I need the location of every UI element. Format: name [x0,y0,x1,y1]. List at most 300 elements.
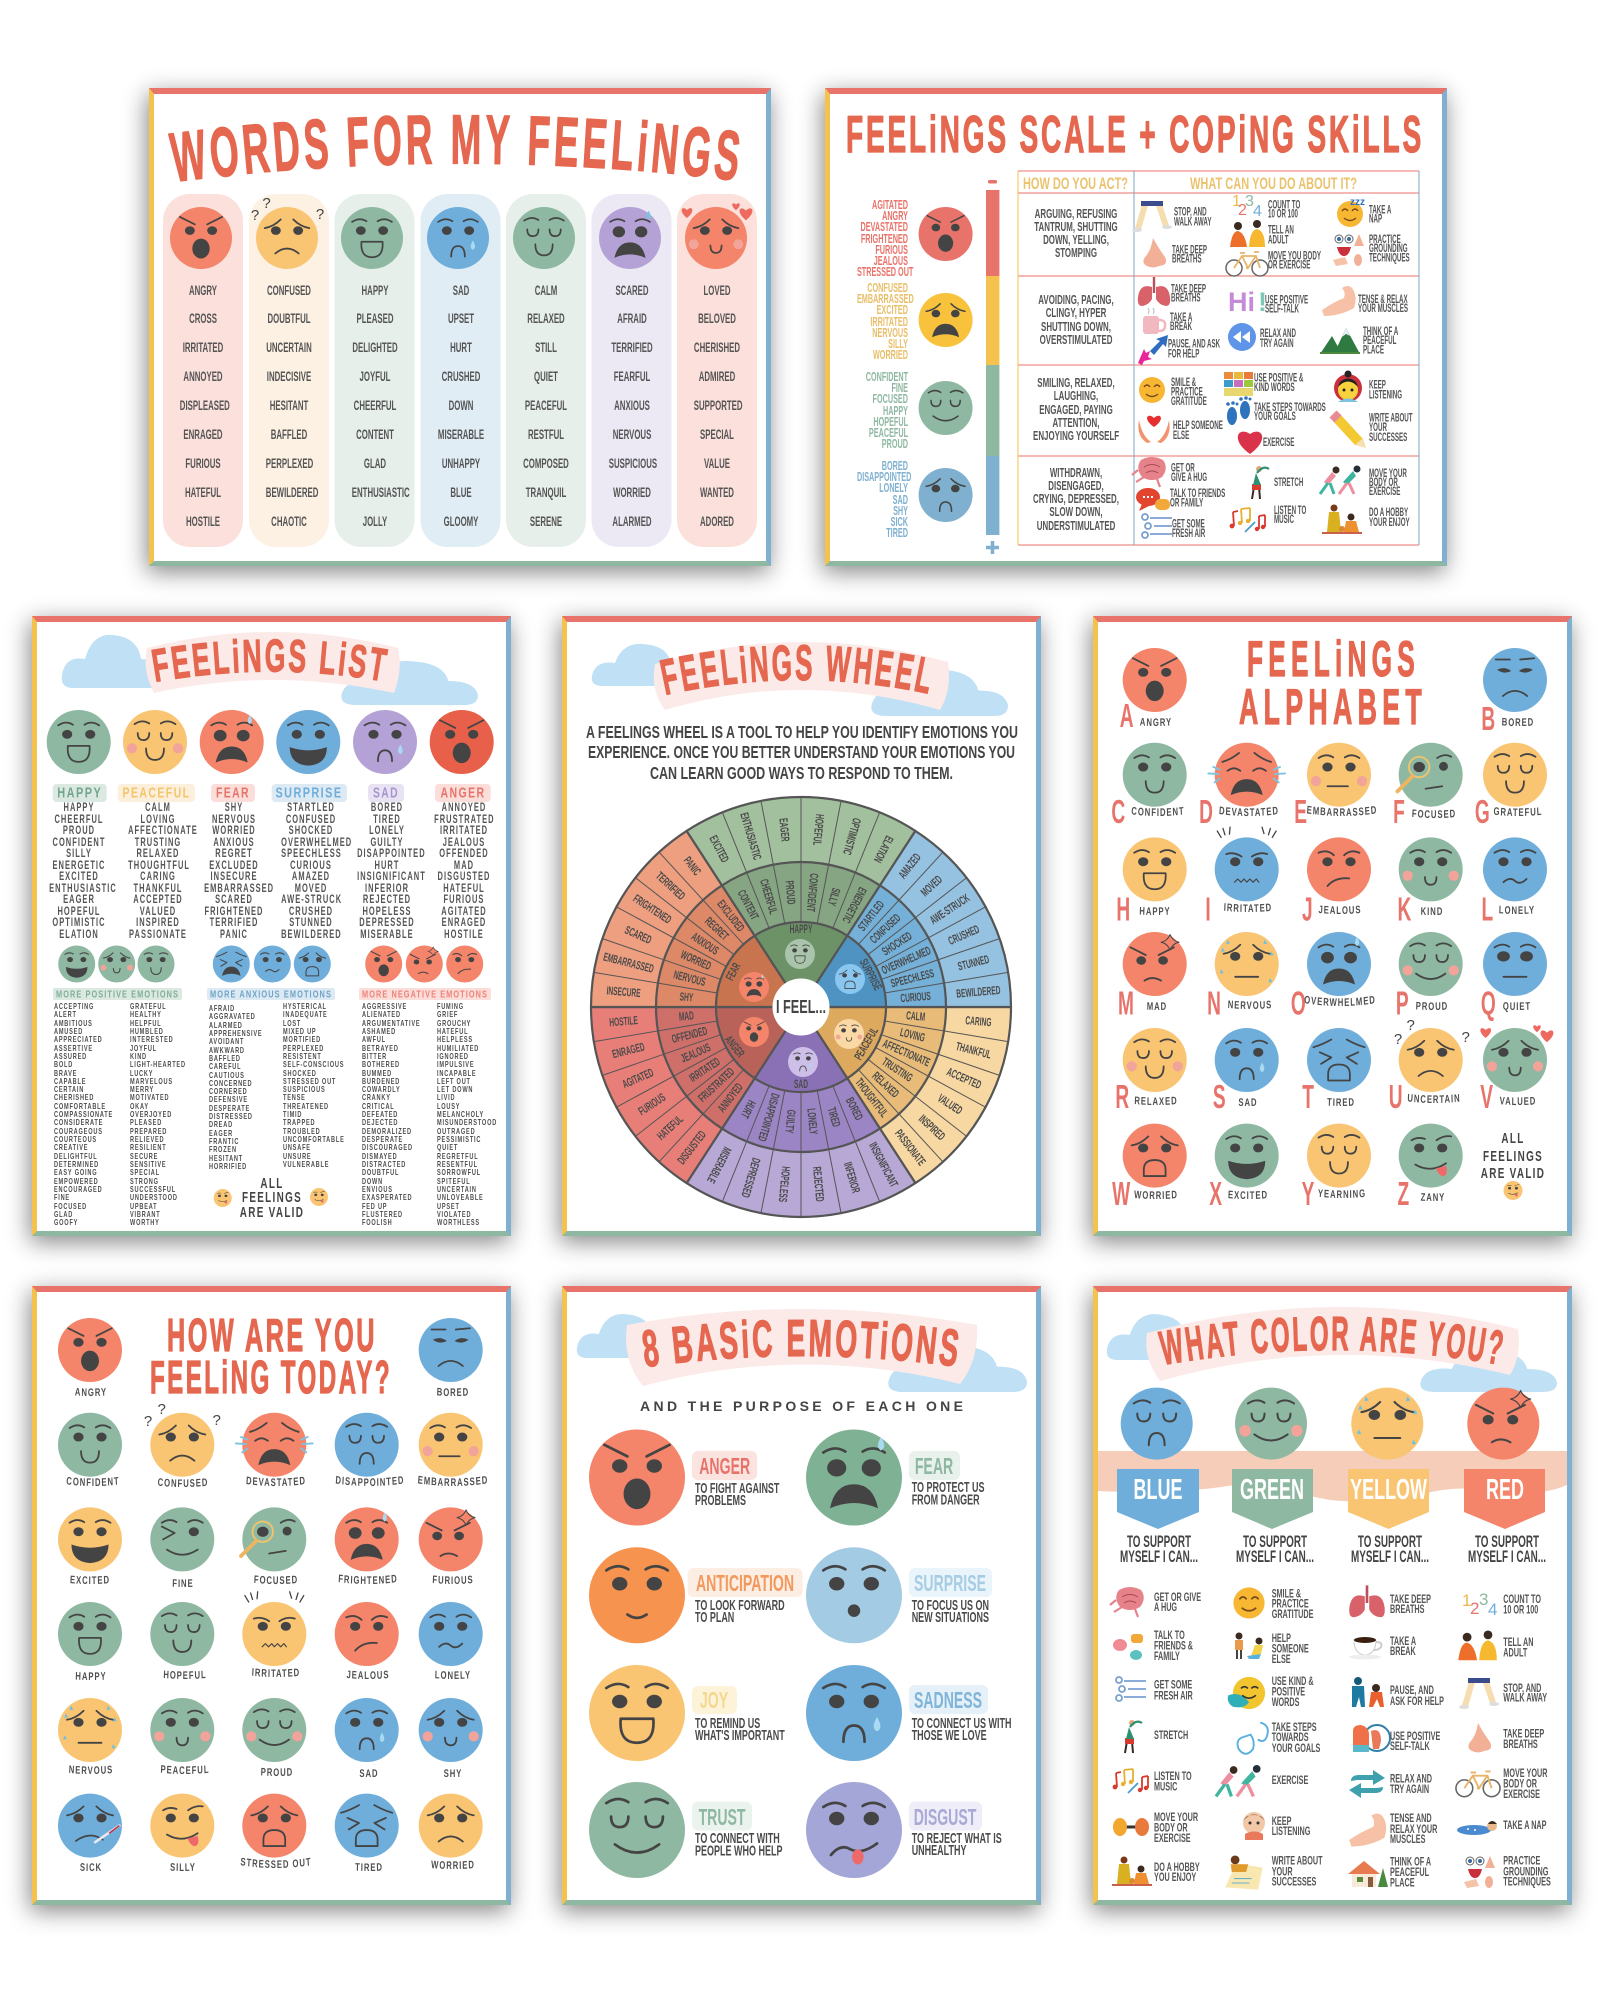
letter U: ? [1394,1031,1402,1048]
coping: peaceful place: PLACE [1363,343,1384,356]
red: count [1462,1590,1541,1619]
words: positive column 1: CONSIDERATE [54,1117,103,1127]
face: tired [335,1794,399,1874]
middle ring labels: TRUSTING [879,1055,915,1085]
words: positive column 1: CAPABLE [54,1076,86,1086]
emotion: anger [589,1430,780,1526]
words: negative column 2: GRIEF [437,1009,458,1019]
all feelings are valid: ARE VALID [1481,1165,1545,1182]
column: sad: CRUSHED [441,369,480,384]
face: confident: CONFIDENT [66,1477,118,1486]
coping: stop and walk away: WALK AWAY [1174,216,1212,228]
coping: move your body: EXERCISE [1369,485,1400,497]
column: loved: SUPPORTED [694,398,743,413]
inner labels: FEAR [724,961,744,983]
words: negative column 1: ARGUMENTATIVE [362,1018,420,1028]
list: anger: ANNOYED [442,802,486,814]
list: peaceful: CALM [145,802,171,814]
words: negative column 2: HUMILIATED [437,1043,479,1053]
words: anxious column 1: DREAD [209,1119,233,1129]
letter R: R [1115,1079,1129,1115]
coping: grounding: TECHNIQUES [1369,252,1410,264]
yellow: pause and ask: ASK FOR HELP [1390,1695,1444,1709]
coping: tense and relax: YOUR MUSCLES [1358,302,1408,315]
yellow: self talk: SELF-TALK [1390,1741,1430,1754]
emotion: surprise [806,1547,992,1643]
emotion: sadness: SADNESS [914,1687,982,1714]
list: anger: IRRITATED [440,825,488,837]
column header: red: RED [1486,1474,1524,1506]
column: scared: FEARFUL [613,369,650,384]
emotion: anticipation [589,1547,803,1643]
coping: stop and walk away [1132,201,1212,232]
words: negative column 1: BETRAYED [362,1043,398,1053]
words: anxious column 1: APPREHENSIVE [209,1028,262,1038]
scale bar [986,180,999,554]
letter U: UNCERTAIN [1408,1094,1460,1103]
list: happy: ENERGETIC [53,860,105,872]
yellow: pause and ask [1352,1677,1444,1709]
face: embarrassed: EMBARRASSED [418,1476,487,1486]
words: anxious column 1: CAREFUL [209,1061,241,1071]
column: loved: CHERISHED [694,340,740,355]
words: anxious column 2: LOST [283,1018,301,1028]
column: scared: SUSPICIOUS [608,456,657,471]
feeling words: yellow zone: EXCITED [877,303,908,317]
feeling words: yellow zone: EMBARRASSED [857,292,914,306]
words: positive column 1: DELIGHTFUL [54,1151,97,1161]
acting column: DISENGAGED, [1048,479,1104,494]
middle ring labels: SPEECHLESS [889,967,936,991]
coping: grounding: GROUNDING [1369,242,1408,255]
coping: help someone: ELSE [1173,429,1189,441]
letter Z: Z [1397,1176,1409,1212]
words: anxious column 2: TIMID [283,1109,302,1119]
list: peaceful: RELAXED [136,848,180,860]
words: anxious column 1: HORRIFIED [209,1161,247,1171]
middle ring labels: CURIOUS [900,990,931,1006]
face: hopeful: HOPEFUL [163,1669,207,1682]
yellow: relax: TRY AGAIN [1390,1784,1429,1797]
face: worried: WORRIED [431,1859,475,1872]
words: positive column 1 [54,1002,130,1230]
letter T [1302,1028,1371,1115]
clouds [62,635,478,705]
emotion headings: PEACEFUL [122,784,190,802]
blue: get or give a hug: A HUG [1154,1602,1177,1615]
title: feelings wheel: FEELiNGS WHEEL [659,644,929,696]
section headers: MORE ANXIOUS EMOTIONS [210,990,332,1000]
list: anger: HOSTILE [444,929,484,941]
coping: hobby: YOUR ENJOY [1369,516,1410,528]
list: fear: TERRIFIED [210,917,258,929]
letter Q: QUIET [1503,1002,1530,1012]
column: scared: AFRAID [617,311,646,326]
emotion: disgust: TO REJECT WHAT IS [912,1830,1002,1847]
acting column: LAUGHING, [1054,389,1098,404]
words: negative column 1: FED UP [362,1200,387,1210]
face: sad [335,1698,399,1780]
letter S [1213,1028,1279,1115]
words: positive column 1: EASY GOING [54,1167,97,1177]
outer ring labels: ACCEPTED [944,1066,983,1093]
emotion: sadness: THOSE WE LOVE [912,1727,987,1744]
words: positive column 2: VIBRANT [130,1209,160,1219]
column: confused: CHAOTIC [271,514,307,529]
face: silly [150,1794,214,1874]
column: scared: ANXIOUS [614,398,649,413]
words: anxious column 1: CORNERED [209,1086,247,1096]
words: negative column 1 [362,1002,438,1230]
outer ring labels: ELATION [870,833,895,865]
letter L [1481,837,1547,928]
letter V: VALUED [1500,1096,1535,1106]
letter A: A [1120,698,1134,734]
words: anxious column 1: CAUTIOUS [209,1070,244,1080]
green: keep listening [1243,1812,1310,1840]
blue: get or give a hug: GET OR GIVE [1154,1591,1201,1605]
letter U: ? [1462,1029,1470,1046]
column: angry [163,207,243,546]
all feelings are valid: FEELINGS [242,1189,302,1206]
feeling words: yellow zone: IRRITATED [870,315,908,329]
acting column: STOMPING [1055,246,1097,261]
column: sad: GLOOMY [443,514,478,529]
words: anxious column 2: MORTIFIED [283,1034,321,1044]
coping: move your body: MOVE YOU BODY [1268,250,1321,262]
column: happy [334,207,414,546]
green: help someone: ELSE [1272,1653,1291,1666]
column: angry: CROSS [189,311,217,326]
column: happy: CONTENT [356,427,393,442]
words: negative column 2: REGRETFUL [437,1151,479,1161]
column: confused: BAFFLED [271,427,307,442]
column header: yellow: YELLOW [1350,1474,1427,1506]
letter D [1199,742,1286,830]
face: shy [419,1698,483,1780]
column: confused: DOUBTFUL [267,311,311,326]
face: confused: ? [213,1412,221,1429]
inner labels [721,923,884,1092]
list: peaceful: ACCEPTED [133,894,183,906]
feeling words: blue zone: SAD [893,493,908,507]
green: kind words [1228,1675,1314,1709]
outer ring labels: MOVED [919,873,946,900]
list: peaceful: THOUGHTFUL [128,860,190,872]
column: confused: ? [251,207,259,224]
coping: grounding [1333,233,1410,266]
coping: positive self talk [1228,287,1308,317]
all feelings are valid: FEELINGS [1483,1148,1543,1165]
coping: count: 4 [1253,203,1262,220]
words: negative column 1: CRITICAL [362,1101,394,1111]
red: grounding [1464,1855,1551,1889]
list: anger: OFFENDED [439,848,489,860]
words: positive column 1: COMPASSIONATE [54,1109,113,1119]
letter Y: Y [1302,1176,1314,1212]
middle ring labels: THOUGHTFUL [852,1076,890,1120]
feeling words: red zone: AGITATED [872,198,908,212]
title: feelings list: FEELiNGS LiST [151,638,388,682]
column: happy: JOLLY [362,514,387,529]
list: happy: EAGER [63,894,95,906]
outer ring labels: EAGER [776,818,791,842]
words: negative column 1: DISCOURAGED [362,1142,412,1152]
face: nervous: NERVOUS [68,1764,114,1777]
green: kind words: USE KIND & [1272,1675,1314,1689]
coping: relax and try again: RELAX AND [1260,327,1296,339]
column: scared: NERVOUS [612,427,651,442]
column: loved: WANTED [700,485,734,500]
coping: positive self talk: USE POSITIVE [1265,294,1308,306]
feeling words: yellow zone: WORRIED [873,348,908,362]
middle ring labels [670,873,936,1143]
letter Z: ZANY [1420,1193,1444,1201]
words: positive column 1: FINE [54,1192,70,1202]
feeling words: yellow zone [820,283,908,363]
words: positive column 2: OVERJOYED [130,1109,172,1119]
title: 8 basic emotions: 8 BASiC EMOTiONS [639,1310,965,1379]
words: positive column 2: HUMBLED [130,1026,163,1036]
list: happy: ELATION [59,929,99,941]
words: anxious column 2: SHOCKED [283,1068,316,1078]
words: positive column 2 [130,1002,206,1230]
words: negative column 1: ENVIOUS [362,1184,392,1194]
yellow: peaceful place: THINK OF A [1390,1856,1431,1869]
list: happy: HOPEFUL [57,906,101,918]
middle ring labels: WORRIED [678,948,713,974]
green: help someone [1235,1632,1309,1666]
face: confused: ? [144,1413,152,1430]
list: anger: HATEFUL [443,883,485,895]
words: negative column 2 [437,1002,509,1230]
words: negative column 1: DOWN [362,1176,383,1186]
list: surprise: STARTLED [287,802,335,814]
middle ring labels: SHOCKED [880,930,915,959]
column header: yellow: MYSELF I CAN... [1351,1547,1429,1566]
words: positive column 1: BRAVE [54,1068,77,1078]
letter F [1393,742,1463,830]
words: positive column 1: COURTEOUS [54,1134,97,1144]
coping: peaceful place: PEACEFUL [1363,334,1397,347]
words: negative column 1: BURDENED [362,1076,400,1086]
list: happy: EXCITED [59,871,99,883]
red: tell an adult: TELL AN [1503,1636,1533,1650]
coping: talk to friends: TALK TO FRIENDS [1170,487,1225,499]
feeling words: yellow zone: CONFUSED [867,281,908,295]
coping: relax and try again: TRY AGAIN [1260,337,1294,349]
face: hopeful [150,1602,214,1679]
letter C: CONFIDENT [1132,807,1184,816]
middle ring labels: JEALOUS [679,1041,713,1066]
yellow: self talk [1353,1725,1441,1754]
feeling words: blue zone: DISAPPOINTED [857,470,911,484]
face: excited: EXCITED [70,1576,109,1584]
yellow: lungs: BREATHS [1390,1604,1425,1617]
words: positive column 1: ALERT [54,1009,77,1019]
column: happy: ENTHUSIASTIC [351,485,409,500]
words: positive column 2: SECURE [130,1151,158,1161]
words: negative column 1: DEFEATED [362,1109,398,1119]
wheel sectors [591,797,1011,1217]
column: confused: BEWILDERED [266,485,318,500]
words: negative column 1: CRANKY [362,1092,390,1102]
feeling words: green zone [820,372,908,452]
words: positive column 1: ACCEPTING [54,1001,94,1011]
feeling words: yellow zone: SILLY [888,337,908,351]
words: anxious column 1: CONCERNED [209,1078,252,1088]
list: sad: INFERIOR [365,883,409,895]
column: confused: INDECISIVE [267,369,311,384]
column: happy: HAPPY [361,282,388,298]
red: bike [1456,1767,1547,1802]
words: anxious column 2: TRAPPED [283,1117,315,1127]
list: fear [188,803,280,943]
emotion: trust: TO CONNECT WITH [695,1830,780,1847]
outer ring labels: INSPIRED [915,1113,948,1144]
letter V [1480,1025,1554,1115]
words: anxious column 2: VULNERABLE [283,1159,329,1169]
words: negative column 1: BITTER [362,1051,387,1061]
words: negative column 2: MISUNDERSTOOD [437,1117,497,1127]
letter B: B [1481,701,1495,737]
column: loved: LOVED [704,282,730,298]
chart: feelings wheel [591,797,1011,1217]
green: write successes: SUCCESSES [1272,1876,1317,1889]
feeling words: green zone: FOCUSED [873,392,908,406]
words: negative column 1: DEMORALIZED [362,1126,412,1136]
red: count: 1 [1462,1591,1471,1610]
red: nose [1468,1723,1545,1752]
blue: music: MUSIC [1154,1781,1177,1794]
words: positive column 2: SUCCESSFUL [130,1184,176,1194]
column: sad [420,207,500,546]
face: angry: ANGRY [75,1388,106,1396]
emotion: surprise: SURPRISE [914,1570,986,1597]
coping: tense and relax [1322,286,1408,316]
coping: kind words [1224,372,1304,396]
small faces row [58,946,483,982]
green: help someone: HELP [1272,1632,1291,1646]
green: smile [1233,1587,1314,1622]
column: angry: FURIOUS [185,456,221,471]
emotion headings: ANGER [440,784,486,802]
coping: music: LISTEN TO [1274,504,1306,516]
list: fear: SHY [225,802,243,814]
title banner [1146,1307,1519,1381]
words: negative column 1: DISMAYED [362,1151,397,1161]
words: anxious column 2: INADEQUATE [283,1009,327,1019]
letter O: OVERWHELMED [1304,996,1374,1006]
red: nap [1457,1819,1547,1835]
coping: stretch: STRETCH [1274,476,1304,488]
column: confused: CONFUSED [267,282,311,298]
face: fine: FINE [172,1579,192,1587]
face: embarrassed [418,1412,487,1486]
blue: talk to friends: TALK TO [1154,1629,1185,1643]
letter X [1209,1124,1279,1212]
list: fear: ANXIOUS [213,837,255,849]
face: focused: FOCUSED [254,1575,297,1584]
feeling words: blue zone: SHY [893,504,908,518]
outer ring labels: FURIOUS [636,1091,669,1119]
letter W [1112,1124,1187,1212]
outer ring labels: TERRIFIED [653,870,687,903]
red: count: 3 [1479,1590,1488,1609]
words: negative column 2: IMPULSIVE [437,1059,475,1069]
face: excited [58,1507,122,1584]
coping: keep listening [1334,370,1402,402]
yellow: break [1349,1635,1416,1660]
letter C [1111,742,1187,830]
words: anxious column 2: STRESSED OUT [283,1076,336,1086]
words: anxious column 1: DESPERATE [209,1103,250,1113]
face: fine [150,1507,214,1587]
list: fear: PANIC [220,929,248,941]
emotion headings: HAPPY [57,784,102,802]
outer ring labels: EXCITED [706,833,731,865]
feeling words: blue zone: TIRED [886,526,908,540]
column: angry: DISPLEASED [180,398,230,413]
blue: talk to friends: FAMILY [1154,1650,1180,1663]
yellow: relax [1349,1770,1432,1798]
column: calm: QUIET [534,369,558,384]
words: positive column 1: FOCUSED [54,1200,87,1210]
words: positive column 1: CERTAIN [54,1084,84,1094]
emotion headings: SAD [373,784,399,802]
outer ring labels: FRIGHTENED [630,892,674,927]
column: confused: PERPLEXED [266,456,313,471]
column header: green: TO SUPPORT [1243,1532,1307,1551]
words: positive column 1: COMFORTABLE [54,1101,106,1111]
column: scared: TERRIFIED [611,340,652,355]
column: angry: ANGRY [189,282,217,298]
list: sad: GUILTY [370,837,404,849]
list: peaceful: AFFECTIONATE [128,825,198,837]
feeling words: green zone: PROUD [882,437,908,451]
letter A [1120,648,1187,734]
column: angry: ANNOYED [183,369,223,384]
words: negative column 1: EXASPERATED [362,1192,412,1202]
coping: pause and ask [1138,335,1220,365]
coping: stop and walk away: STOP, AND [1174,206,1207,218]
column: happy: JOYFUL [359,369,390,384]
words: anxious column 2: THREATENED [283,1101,329,1111]
title: feelings alphabet: FEELiNGS [1247,631,1420,687]
face: disappointed [334,1412,404,1486]
letter G [1475,742,1547,830]
letter C: C [1111,794,1125,830]
letter T: TIRED [1327,1098,1354,1106]
outer ring labels: AMAZED [896,851,924,882]
letter E: EMBARRASSED [1307,806,1376,816]
words: positive column 2: KIND [130,1051,147,1061]
green: smile: GRATITUDE [1272,1609,1314,1622]
words: negative column 1: DOUBTFUL [362,1167,399,1177]
middle ring labels: CONFUSED [868,912,904,947]
inner labels: HAPPY [790,923,813,937]
list: surprise: SHOCKED [289,825,333,837]
list: peaceful: LOVING [141,814,175,826]
clouds [1107,1314,1557,1392]
list: peaceful: CARING [140,871,176,883]
emotion: trust [589,1782,782,1878]
words: positive column 2: SENSITIVE [130,1159,166,1169]
yellow: relax: RELAX AND [1390,1773,1432,1786]
feeling words: red zone: ANGRY [882,209,908,223]
face: peaceful: PEACEFUL [160,1763,210,1777]
list: fear: WORRIED [212,825,256,837]
